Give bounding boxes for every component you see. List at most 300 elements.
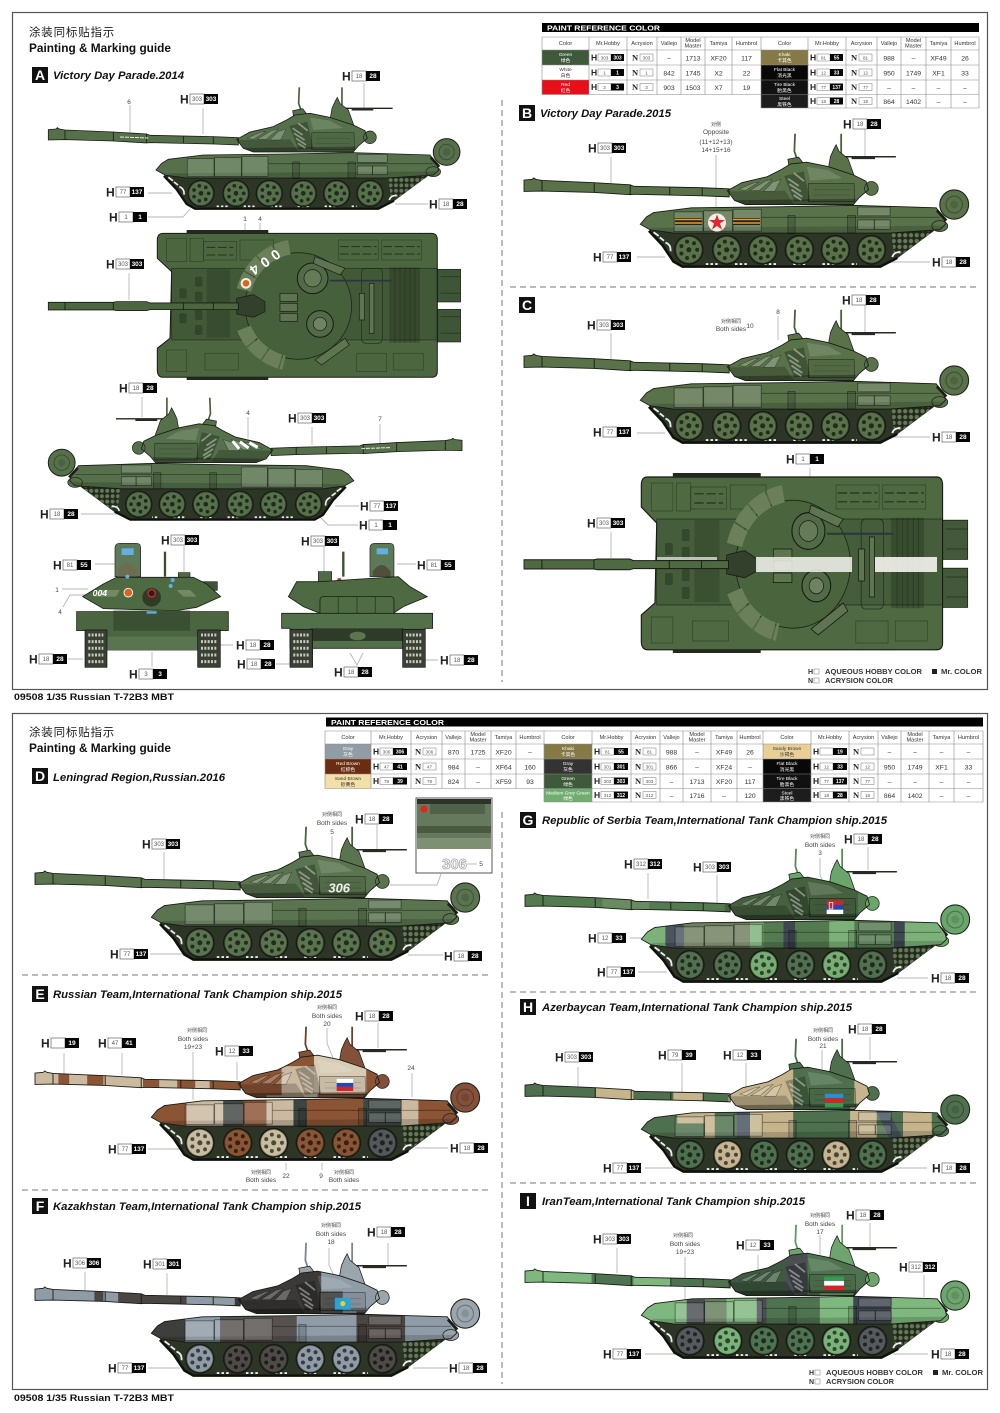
row: steel: 18 bbox=[865, 793, 870, 798]
row: khaki: 988 bbox=[666, 750, 677, 756]
paint reference table, upper sheet: Color bbox=[559, 41, 572, 47]
paint reference table, lower sheet: Medium Grey Green bbox=[546, 790, 590, 796]
row: gray 306 bbox=[373, 746, 532, 756]
row: gray 306: 306 bbox=[383, 750, 391, 754]
paint callouts: scheme A: H bbox=[334, 665, 343, 679]
paint reference table, upper sheet: Vallejo bbox=[661, 41, 677, 47]
paint callouts: schemes G, H and I: 137 bbox=[623, 969, 634, 976]
badge C bbox=[519, 297, 535, 313]
row: red brown: 160 bbox=[524, 764, 536, 772]
paint callouts: schemes B and C: H bbox=[587, 516, 596, 530]
paint callouts: scheme A: 18 bbox=[251, 662, 258, 668]
legend: upper sheet colour codes bbox=[808, 669, 982, 685]
row: flat black: 33 bbox=[837, 764, 843, 770]
tank G side view, Serbian camouflage bbox=[525, 849, 970, 982]
paint reference table, upper sheet: Tamiya bbox=[930, 41, 948, 47]
paint callouts: schemes D, E and F bbox=[41, 812, 488, 1375]
paint callouts: schemes B and C: 303 bbox=[613, 520, 624, 527]
paint callouts: schemes G, H and I: H bbox=[588, 931, 597, 945]
row: steel: 864 bbox=[884, 793, 895, 800]
row: gray 306: 1725 bbox=[470, 750, 486, 756]
paint reference table, upper sheet: 白色 bbox=[561, 72, 570, 79]
paint callouts: scheme A: 28 bbox=[263, 642, 271, 649]
row: green: 303 bbox=[643, 56, 651, 60]
title D: Leningrad Region,Russian.2016 bbox=[53, 772, 226, 784]
row: sand brown: 824 bbox=[448, 779, 459, 786]
paint callouts: scheme A: H bbox=[40, 507, 49, 521]
paint callouts: scheme A: 303 bbox=[300, 416, 311, 422]
paint callouts: scheme A: H bbox=[359, 518, 368, 532]
paint callouts: scheme A: H bbox=[301, 534, 310, 548]
decal number notes: 对侧相同 bbox=[187, 1027, 207, 1034]
paint callouts: schemes D, E and F: H bbox=[450, 1141, 459, 1155]
paint callouts: schemes G, H and I: 28 bbox=[958, 1351, 966, 1358]
decal number notes: Both sides bbox=[670, 1241, 701, 1248]
paint reference table, lower sheet: Gray bbox=[563, 761, 574, 767]
paint callouts: scheme A: 28 bbox=[264, 661, 272, 668]
paint callouts: schemes G, H and I: 18 bbox=[862, 1027, 869, 1033]
row: red brown: 47 bbox=[427, 764, 432, 770]
row: tire black: – bbox=[887, 85, 891, 92]
row: white: 1 bbox=[603, 70, 606, 76]
paint callouts: schemes B and C: 18 bbox=[946, 435, 953, 441]
paint reference table, lower sheet: Sandy Brown bbox=[773, 746, 802, 752]
row: tire black: 77 bbox=[824, 779, 829, 784]
paint reference table, upper sheet: Vallejo bbox=[881, 41, 897, 47]
row: tire black: – bbox=[940, 779, 944, 786]
row: steel: 18 bbox=[863, 99, 868, 104]
row: khaki: 988 bbox=[883, 56, 895, 62]
legend: upper sheet colour codes: N bbox=[808, 678, 813, 685]
paint reference table, lower sheet: 红棕色 bbox=[341, 766, 355, 773]
paint reference table, lower sheet: Vallejo bbox=[445, 735, 462, 741]
paint reference table, lower sheet: Model bbox=[907, 732, 923, 738]
row: white: 1745 bbox=[685, 70, 701, 78]
paint callouts: scheme A: 28 bbox=[369, 73, 377, 80]
row: white: 22 bbox=[743, 70, 750, 78]
row: flat black: 1749 bbox=[907, 764, 923, 772]
row: flat black: 950 bbox=[884, 764, 895, 772]
paint callouts: schemes G, H and I: 77 bbox=[617, 1352, 624, 1358]
paint callouts: schemes G, H and I: H bbox=[931, 1347, 940, 1361]
row: tire black: – bbox=[888, 779, 892, 786]
paint reference table, lower sheet: 绿色 bbox=[563, 795, 573, 802]
paint callouts: schemes G, H and I: H bbox=[593, 1232, 602, 1246]
paint reference table, lower sheet: Color bbox=[780, 735, 794, 741]
row: tire black: – bbox=[967, 779, 971, 786]
badge F bbox=[32, 1198, 48, 1214]
paint reference table, lower sheet: Flat Black bbox=[776, 761, 798, 767]
row: steel: H bbox=[813, 790, 819, 800]
paint callouts: schemes G, H and I: 12 bbox=[602, 936, 609, 942]
marking: white stripe on tank C bbox=[657, 557, 937, 572]
row: tire black: 137 bbox=[832, 85, 841, 91]
paint callouts: scheme A: 28 bbox=[467, 657, 475, 664]
row: steel: 18 bbox=[824, 793, 829, 798]
decal number notes: Both sides bbox=[312, 1013, 343, 1020]
paint callouts: scheme A: H bbox=[129, 667, 138, 681]
row: red brown: – bbox=[476, 764, 480, 772]
row: sandy brown: H bbox=[813, 746, 819, 756]
paint callouts: scheme A: H bbox=[237, 657, 246, 671]
paint callouts: schemes G, H and I: H bbox=[899, 1260, 908, 1274]
row: red: 19 bbox=[743, 85, 750, 92]
row: flat black: 12 bbox=[821, 70, 826, 76]
paint callouts: schemes D, E and F: 41 bbox=[125, 1040, 133, 1047]
row: sand brown: 39 bbox=[397, 779, 403, 785]
row: khaki: 81 bbox=[605, 750, 610, 754]
paint reference table, upper sheet: 绿色 bbox=[561, 57, 570, 64]
paint callouts: scheme A: 303 bbox=[132, 261, 143, 268]
paint reference table, upper sheet: 卡其色 bbox=[777, 57, 792, 64]
paint callouts: schemes G, H and I: 303 bbox=[605, 1237, 616, 1243]
paint reference table, upper sheet: Flat Black bbox=[774, 67, 796, 73]
decal number notes: 19+23 bbox=[184, 1044, 203, 1051]
paint callouts: schemes G, H and I: H bbox=[844, 832, 853, 846]
row: white: 1 bbox=[616, 70, 619, 76]
paint reference table, lower sheet: PAINT REFERENCE COLOR bbox=[331, 718, 445, 727]
paint callouts: scheme A: 55 bbox=[444, 562, 452, 569]
paint reference table, lower sheet: 灰色 bbox=[563, 766, 573, 773]
paint reference table, lower sheet: Acrysion bbox=[853, 735, 874, 741]
paint reference table, upper sheet: Mr.Hobby bbox=[815, 41, 839, 47]
inset: rear turret number detail bbox=[416, 798, 492, 873]
decal number notes: 21 bbox=[819, 1043, 827, 1050]
row: tire black: H bbox=[810, 82, 816, 92]
paint callouts: schemes D, E and F: 28 bbox=[476, 1365, 484, 1372]
paint callouts: schemes B and C: 18 bbox=[946, 260, 953, 266]
paint callouts: schemes G, H and I: 28 bbox=[958, 975, 966, 982]
row: red: 903 bbox=[663, 85, 675, 92]
heading: painting and marking guide, upper sheet: 涂装同标贴指示 bbox=[29, 25, 115, 39]
paint reference table, upper sheet bbox=[542, 23, 979, 108]
decal number notes: Both sides bbox=[178, 1036, 209, 1043]
paint callouts: schemes D, E and F: 28 bbox=[394, 1229, 402, 1236]
paint callouts: schemes G, H and I: H bbox=[693, 860, 702, 874]
row: flat black: 12 bbox=[865, 764, 870, 770]
paint reference table, upper sheet: PAINT REFERENCE COLOR bbox=[547, 24, 661, 32]
row: medium grey green: 312 bbox=[646, 793, 654, 798]
row: sandy brown: – bbox=[967, 750, 971, 756]
paint reference table, lower sheet: Sand Brown bbox=[335, 776, 361, 782]
paint callouts: schemes D, E and F: 77 bbox=[122, 1366, 129, 1372]
row: khaki: 81 bbox=[821, 56, 826, 60]
decal number notes: 对侧相同 bbox=[810, 1212, 830, 1219]
paint callouts: schemes D, E and F: H bbox=[215, 1044, 224, 1058]
paint callouts: schemes D, E and F: H bbox=[110, 947, 119, 961]
paint callouts: scheme A: 18 bbox=[54, 512, 61, 518]
badge D: D bbox=[35, 768, 45, 784]
paint reference table, lower sheet: Color bbox=[561, 735, 575, 741]
row: flat black: 33 bbox=[961, 70, 969, 78]
decal number notes: Both sides bbox=[316, 1231, 347, 1238]
paint callouts: scheme A: 137 bbox=[386, 503, 397, 510]
paint callouts: schemes B and C: 28 bbox=[959, 259, 967, 266]
paint reference table, lower sheet: Steel bbox=[782, 790, 792, 796]
row: red brown bbox=[373, 762, 536, 772]
paint callouts: schemes D, E and F: 137 bbox=[134, 1365, 145, 1372]
paint callouts: schemes B and C: 18 bbox=[857, 122, 864, 128]
legend: lower sheet colour codes: N bbox=[809, 1379, 814, 1386]
row: flat black: XF1 bbox=[935, 764, 948, 772]
paint reference table, lower sheet: Vallejo bbox=[881, 735, 898, 741]
paint callouts: scheme A: 81 bbox=[431, 563, 438, 569]
paint reference table, upper sheet: 红色 bbox=[561, 87, 570, 94]
paint callouts: scheme A: 303 bbox=[327, 538, 338, 545]
paint reference table, lower sheet: 卡其色 bbox=[561, 751, 575, 758]
paint callouts: scheme A: 3 bbox=[144, 672, 148, 678]
row: tire black: – bbox=[937, 85, 941, 92]
title I: IranTeam,International Tank Champion ship.2015 bbox=[542, 1196, 806, 1208]
row: white: 1 bbox=[645, 70, 648, 76]
paint callouts: schemes D, E and F: H bbox=[143, 1257, 152, 1271]
badge E: E bbox=[35, 986, 45, 1002]
paint callouts: schemes D, E and F: 306 bbox=[89, 1260, 100, 1267]
paint callouts: scheme A: H bbox=[342, 69, 351, 83]
decal number notes: Both sides bbox=[805, 842, 836, 849]
badge H: H bbox=[523, 999, 533, 1015]
paint reference table, lower sheet: Mr.Hobby bbox=[818, 735, 842, 741]
row: gray 301: H bbox=[594, 762, 600, 772]
paint callouts: schemes B and C: 28 bbox=[869, 297, 877, 304]
paint callouts: scheme A: 1 bbox=[138, 214, 142, 221]
row: steel: 1402 bbox=[907, 793, 923, 800]
decal number notes: 8 bbox=[776, 309, 780, 316]
tank D side view with number 306: 306 bbox=[328, 880, 351, 895]
paint callouts: schemes G, H and I: 312 bbox=[650, 861, 661, 868]
paint callouts: schemes G, H and I: 28 bbox=[875, 1026, 883, 1033]
paint callouts: schemes G, H and I: 28 bbox=[959, 1165, 967, 1172]
paint callouts: schemes G, H and I: 18 bbox=[945, 1352, 952, 1358]
legend: upper sheet colour codes: Mr. COLOR bbox=[941, 669, 982, 676]
paint callouts: schemes D, E and F: 33 bbox=[242, 1048, 250, 1055]
row: khaki: 55 bbox=[618, 750, 624, 756]
row: red: 1503 bbox=[685, 85, 701, 92]
row: sandy brown: – bbox=[913, 750, 917, 756]
row: white: H bbox=[591, 68, 597, 78]
paint callouts: schemes D, E and F: 77 bbox=[124, 952, 131, 958]
paint reference table, lower sheet: Tamiya bbox=[933, 735, 951, 741]
row: khaki: 81 bbox=[863, 56, 868, 60]
row: red: X7 bbox=[714, 85, 723, 92]
paint callouts: schemes G, H and I: 303 bbox=[705, 865, 716, 871]
row: khaki: 55 bbox=[834, 56, 839, 62]
row: khaki bbox=[594, 746, 754, 756]
paint callouts: schemes G, H and I: 303 bbox=[619, 1236, 630, 1243]
row: tire black: – bbox=[913, 779, 917, 786]
row: flat black bbox=[813, 762, 972, 772]
row: sand brown: N bbox=[415, 776, 422, 786]
heading: painting and marking guide, upper sheet: Painting & Marking guide bbox=[29, 41, 171, 55]
badge I bbox=[520, 1193, 536, 1209]
paint callouts: schemes B and C: 77 bbox=[607, 430, 614, 436]
title F: Kazakhstan Team,International Tank Champion ship.2015 bbox=[53, 1201, 362, 1213]
paint callouts: schemes D, E and F: 303 bbox=[168, 841, 179, 848]
decal number notes: 对侧相同 bbox=[810, 833, 830, 840]
decal number notes: 7 bbox=[378, 416, 382, 423]
badge D bbox=[32, 768, 48, 784]
paint reference table, lower sheet: Tire Black bbox=[776, 776, 798, 782]
decal number notes: 9 bbox=[319, 1173, 323, 1180]
row: khaki: – bbox=[695, 750, 699, 756]
row: flat black bbox=[810, 68, 969, 78]
paint callouts: scheme A bbox=[29, 69, 478, 681]
tank F side view, gray camouflage bbox=[35, 1243, 480, 1376]
row: steel: 28 bbox=[837, 793, 843, 799]
row: green: 1713 bbox=[685, 56, 701, 62]
paint callouts: scheme A: H bbox=[360, 499, 369, 513]
badge I: I bbox=[526, 1193, 530, 1209]
paint callouts: scheme A: H bbox=[417, 558, 426, 572]
row: flat black: 12 bbox=[824, 764, 829, 770]
decal number notes: 24 bbox=[407, 1065, 415, 1072]
paint callouts: schemes G, H and I: 312 bbox=[911, 1265, 922, 1271]
row: steel: 864 bbox=[883, 99, 895, 106]
paint callouts: schemes G, H and I: 312 bbox=[925, 1264, 936, 1271]
paint callouts: schemes B and C: 303 bbox=[599, 521, 610, 527]
paint callouts: scheme A: 28 bbox=[67, 511, 75, 518]
row: green bbox=[591, 52, 752, 62]
row: red brown: 41 bbox=[397, 764, 403, 770]
badge A: A bbox=[35, 67, 45, 83]
row: gray 301: 866 bbox=[666, 764, 677, 772]
paint reference table, lower sheet: Color bbox=[341, 735, 355, 741]
paint reference table, lower sheet: Vallejo bbox=[663, 735, 680, 741]
paint callouts: scheme A: 137 bbox=[132, 189, 143, 196]
paint callouts: schemes G, H and I: 12 bbox=[750, 1243, 757, 1249]
badge G: G bbox=[523, 812, 534, 828]
flag: Russia bbox=[337, 1079, 353, 1091]
paint callouts: scheme A: 28 bbox=[146, 385, 154, 392]
tank C side view bbox=[524, 310, 969, 443]
paint reference table, lower sheet: Khaki bbox=[562, 746, 574, 752]
row: sand brown: – bbox=[476, 779, 480, 786]
paint callouts: schemes D, E and F: 301 bbox=[169, 1261, 180, 1268]
paint callouts: schemes G, H and I: H bbox=[848, 1022, 857, 1036]
decal number notes: 对侧相同 bbox=[813, 1027, 833, 1034]
paint callouts: schemes G, H and I: H bbox=[597, 965, 606, 979]
tank C top view bbox=[524, 473, 968, 653]
row: green: – bbox=[670, 779, 674, 786]
paint reference table, lower sheet: 绿色 bbox=[563, 781, 573, 788]
decal number notes: 对侧 bbox=[711, 121, 721, 128]
paint callouts: schemes D, E and F: H bbox=[449, 1361, 458, 1375]
decal number notes: 对侧相同 bbox=[322, 811, 342, 818]
paint reference table, upper sheet: Model bbox=[685, 38, 701, 44]
decal number notes: Both sides bbox=[317, 820, 348, 827]
row: tire black: – bbox=[963, 85, 967, 92]
paint callouts: schemes D, E and F: 28 bbox=[382, 1013, 390, 1020]
decal number notes: Both sides bbox=[805, 1221, 836, 1228]
row: sandy brown bbox=[813, 746, 971, 756]
row: red bbox=[591, 82, 750, 92]
row: gray 301: – bbox=[748, 764, 752, 772]
paint callouts: schemes G, H and I bbox=[555, 832, 970, 1361]
paint reference table, upper sheet: Color bbox=[778, 41, 791, 47]
paint reference table, upper sheet: Master bbox=[905, 44, 922, 50]
decal number notes: 19+23 bbox=[676, 1249, 695, 1256]
paint reference table, lower sheet: Acrysion bbox=[635, 735, 656, 741]
row: flat black: N bbox=[851, 68, 858, 78]
tank A rear view bbox=[282, 543, 433, 667]
paint callouts: schemes B and C: 137 bbox=[619, 429, 630, 436]
row: red: 3 bbox=[616, 85, 619, 91]
row: medium grey green: H bbox=[594, 790, 600, 800]
row: red: N bbox=[632, 82, 639, 92]
row: gray 301: 301 bbox=[604, 764, 612, 770]
row: gray 306: 306 bbox=[396, 750, 404, 756]
row: khaki: 81 bbox=[647, 750, 652, 754]
decal number notes: Both sides bbox=[716, 326, 747, 333]
paint callouts: scheme A: 303 bbox=[173, 538, 184, 544]
paint callouts: schemes G, H and I: 39 bbox=[685, 1052, 693, 1059]
row: green: H bbox=[591, 52, 597, 62]
paint callouts: schemes D, E and F: 28 bbox=[477, 1145, 485, 1152]
paint callouts: scheme A: 1 bbox=[124, 215, 128, 221]
title E: Russian Team,International Tank Champion ship.2015 bbox=[53, 989, 343, 1001]
paint callouts: scheme A: H bbox=[53, 558, 62, 572]
row: white: 842 bbox=[663, 70, 675, 78]
paint callouts: schemes G, H and I: 137 bbox=[629, 1351, 640, 1358]
paint callouts: schemes G, H and I: 303 bbox=[567, 1055, 578, 1061]
title B: Victory Day Parade.2015 bbox=[540, 108, 672, 120]
paint reference table, upper sheet: Humbrol bbox=[736, 41, 757, 47]
row: steel: – bbox=[967, 793, 971, 800]
paint reference table, lower sheet bbox=[325, 718, 983, 802]
page frame: upper sheet bbox=[12, 12, 988, 690]
row: green: N bbox=[635, 776, 642, 786]
paint callouts: schemes G, H and I: 303 bbox=[581, 1054, 592, 1061]
paint callouts: schemes D, E and F: 137 bbox=[136, 951, 147, 958]
decal: ribbon and star bbox=[675, 214, 760, 232]
row: green: 303 bbox=[604, 779, 612, 784]
row: steel: 1402 bbox=[906, 99, 921, 106]
row: khaki: H bbox=[594, 746, 600, 756]
paint callouts: schemes G, H and I: H bbox=[603, 1347, 612, 1361]
row: flat black: 12 bbox=[863, 70, 868, 76]
paint callouts: schemes G, H and I: 33 bbox=[763, 1242, 771, 1249]
paint reference table, lower sheet: Humbrol bbox=[519, 735, 541, 741]
row: sand brown: 79 bbox=[427, 779, 432, 784]
title G: Republic of Serbia Team,International Tank Champion ship.2015 bbox=[542, 815, 888, 827]
row: khaki: XF49 bbox=[716, 750, 732, 756]
paint callouts: schemes B and C: 303 bbox=[600, 146, 611, 152]
paint callouts: schemes D, E and F: 18 bbox=[369, 817, 376, 823]
row: tire black: – bbox=[912, 85, 916, 92]
badge B bbox=[519, 105, 535, 121]
paint callouts: schemes G, H and I: 137 bbox=[629, 1165, 640, 1172]
paint callouts: scheme A: 18 bbox=[443, 202, 450, 208]
flag: Serbia bbox=[827, 901, 843, 914]
paint reference table, lower sheet: Tamiya bbox=[495, 735, 513, 741]
paint callouts: schemes D, E and F: 28 bbox=[382, 816, 390, 823]
paint callouts: scheme A: H bbox=[161, 533, 170, 547]
row: white: X2 bbox=[714, 70, 723, 78]
paint callouts: schemes D, E and F: 137 bbox=[134, 1146, 145, 1153]
paint callouts: scheme A: H bbox=[106, 257, 115, 271]
paint callouts: schemes G, H and I: H bbox=[846, 1208, 855, 1222]
paint callouts: scheme A: 1 bbox=[374, 523, 378, 529]
row: white: N bbox=[632, 68, 639, 78]
row: steel: N bbox=[853, 790, 860, 800]
row: gray 301: XF24 bbox=[716, 764, 732, 772]
paint callouts: schemes G, H and I: 18 bbox=[945, 976, 952, 982]
paint callouts: schemes B and C: 303 bbox=[599, 323, 610, 329]
paint callouts: schemes D, E and F: 19 bbox=[68, 1040, 76, 1047]
row: gray 301: 301 bbox=[646, 764, 654, 770]
paint callouts: schemes D, E and F: H bbox=[41, 1036, 50, 1050]
paint callouts: schemes G, H and I: 312 bbox=[636, 862, 647, 868]
